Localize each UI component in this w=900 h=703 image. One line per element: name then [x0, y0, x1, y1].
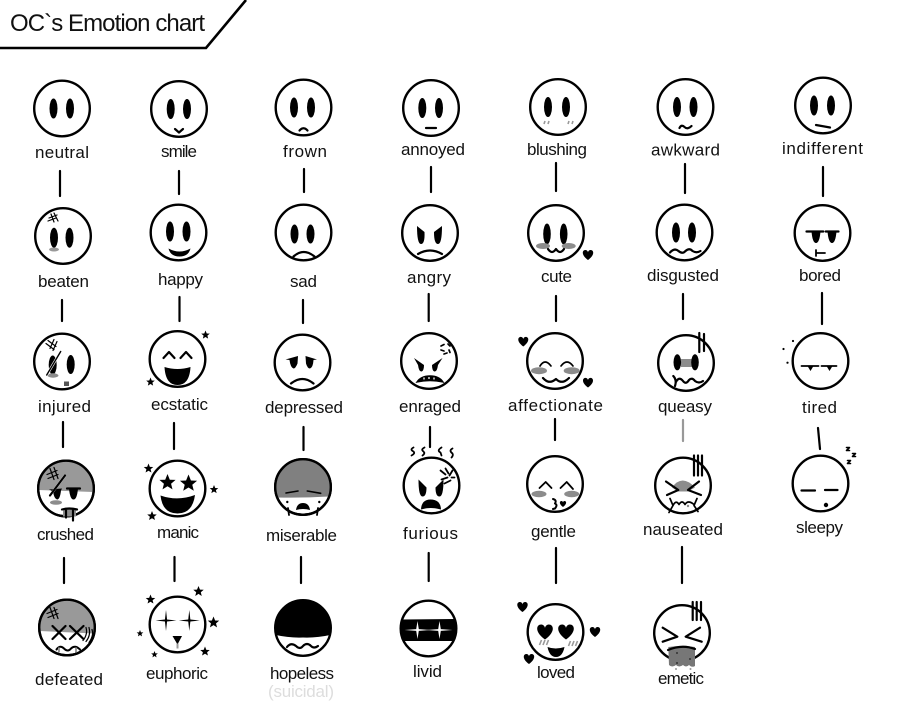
- emotion: euphoric: [137, 586, 219, 683]
- label: furious: furious: [403, 524, 458, 543]
- icon: bored face: [795, 205, 850, 261]
- label: depressed: depressed: [265, 398, 343, 417]
- emotion: manic: [144, 461, 218, 542]
- icon: awkward face: [658, 79, 713, 135]
- emotion: blushing: [527, 79, 587, 159]
- icon: emetic face: [654, 602, 710, 670]
- label: smile: smile: [161, 142, 197, 161]
- emotion: neutral: [34, 81, 90, 162]
- icon: indifferent face: [795, 78, 851, 133]
- icon: furious face: [404, 448, 459, 513]
- title banner: [0, 0, 246, 48]
- label: defeated: defeated: [35, 670, 103, 689]
- icon: angry face: [402, 205, 458, 261]
- label: suicidal note: (suicidal): [268, 682, 334, 701]
- label: beaten: beaten: [38, 272, 89, 291]
- emotion: defeated: [35, 600, 103, 689]
- icon: frown face: [276, 80, 331, 135]
- label: euphoric: euphoric: [146, 664, 208, 683]
- label: loved: loved: [537, 663, 575, 682]
- label: manic: manic: [157, 523, 200, 542]
- label: gentle: gentle: [531, 522, 576, 541]
- icon: gentle face: [527, 456, 583, 512]
- emotion: hopeless: [268, 600, 334, 701]
- label: indifferent: indifferent: [782, 139, 863, 158]
- icon: smile face: [151, 81, 207, 137]
- emotion: annoyed: [401, 80, 465, 159]
- emotion: smile: [151, 81, 207, 161]
- icon: blushing face: [530, 79, 586, 135]
- icon: affectionate face: [518, 333, 593, 389]
- icon: miserable face: [275, 459, 331, 515]
- emotion: depressed: [265, 335, 343, 417]
- emotion: awkward: [651, 79, 720, 160]
- emotion: indifferent: [782, 78, 863, 158]
- label: crushed: crushed: [37, 525, 94, 544]
- label: disgusted: disgusted: [647, 266, 719, 285]
- emotion: emetic: [654, 602, 710, 688]
- icon: sad face: [276, 205, 331, 260]
- label: blushing: blushing: [527, 140, 587, 159]
- label: hopeless: hopeless: [270, 664, 334, 683]
- icon: manic face: [144, 461, 218, 520]
- label: annoyed: annoyed: [401, 140, 465, 159]
- emotion: ecstatic: [146, 330, 210, 414]
- emotion: affectionate: [508, 333, 603, 415]
- icon: crushed face: [38, 461, 94, 520]
- icon: nauseated face: [655, 456, 711, 513]
- emotion: gentle: [527, 456, 583, 541]
- group: hopeless labels: [268, 664, 334, 701]
- label: sleepy: sleepy: [796, 518, 844, 537]
- emotion: nauseated: [643, 456, 723, 539]
- emotion: livid: [401, 601, 456, 681]
- emotion: bored: [795, 205, 850, 285]
- emotion: happy: [151, 205, 206, 289]
- label: ecstatic: ecstatic: [151, 395, 208, 414]
- label: bored: bored: [799, 266, 841, 285]
- icon: injured face: [34, 334, 90, 389]
- label: injured: injured: [38, 397, 91, 416]
- icon: loved face: [517, 602, 600, 664]
- icon: neutral face: [34, 81, 90, 136]
- emotion: sad: [276, 205, 331, 291]
- icon: sleepy face: [793, 448, 856, 511]
- label: enraged: enraged: [399, 397, 461, 416]
- emotion: angry: [402, 205, 458, 287]
- emotion: frown: [276, 80, 331, 161]
- icon: hopeless face: [275, 600, 331, 656]
- label: nauseated: nauseated: [643, 520, 723, 539]
- icon: livid face: [401, 601, 456, 656]
- label: queasy: queasy: [658, 397, 712, 416]
- label: happy: happy: [158, 270, 204, 289]
- emotion: queasy: [658, 333, 714, 416]
- icon: ecstatic face: [146, 330, 210, 387]
- emotion: tired: [782, 333, 848, 417]
- label: frown: frown: [283, 142, 327, 161]
- emotion: disgusted: [647, 205, 719, 285]
- label: miserable: miserable: [266, 526, 337, 545]
- label: affectionate: affectionate: [508, 396, 603, 415]
- label: sad: sad: [290, 272, 317, 291]
- emotion: crushed: [37, 461, 94, 544]
- emotion: enraged: [399, 333, 461, 416]
- emotion: loved: [517, 602, 600, 682]
- icon: annoyed face: [403, 80, 459, 136]
- icon: depressed face: [275, 335, 330, 390]
- icon: queasy face: [658, 333, 714, 391]
- label: livid: livid: [413, 662, 442, 681]
- label: emetic: emetic: [658, 669, 704, 688]
- emotion: beaten: [35, 208, 91, 291]
- icon: enraged face: [401, 333, 457, 389]
- label: neutral: neutral: [35, 143, 89, 162]
- label: angry: angry: [407, 268, 452, 287]
- label: tired: tired: [802, 398, 837, 417]
- label: awkward: awkward: [651, 140, 720, 160]
- icon: disgusted face: [657, 205, 712, 260]
- emotion: cute: [528, 205, 593, 286]
- icon: defeated face: [39, 600, 95, 655]
- label: cute: cute: [541, 267, 572, 286]
- connector lines between emotion levels: [60, 163, 823, 583]
- icon: cute face: [528, 205, 593, 261]
- icon: happy face: [151, 205, 206, 260]
- emotion: miserable: [266, 459, 337, 545]
- emotion: injured: [34, 334, 91, 416]
- emotion: sleepy: [793, 448, 856, 537]
- emotion: furious: [403, 448, 459, 543]
- icon: tired face: [782, 333, 848, 389]
- title: OC`s Emotion chart: [10, 10, 205, 37]
- icon: euphoric face: [137, 586, 219, 657]
- icon: beaten face: [35, 208, 91, 264]
